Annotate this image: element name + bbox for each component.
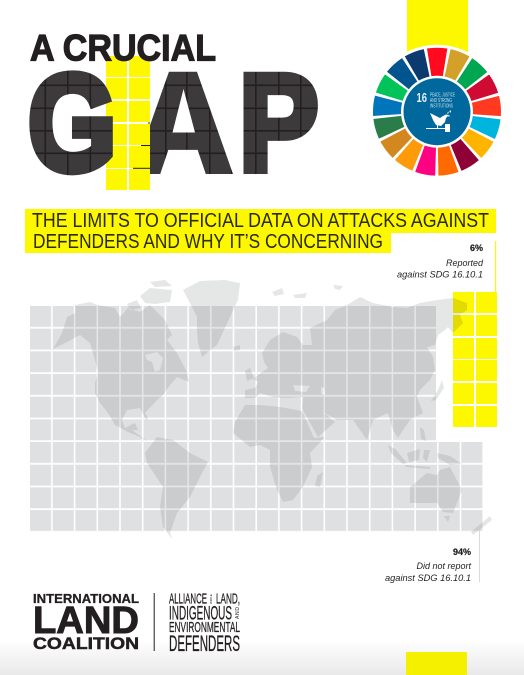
logo divider (154, 593, 155, 651)
map land outside grid (53, 280, 492, 540)
callout: 6% reported: against SDG 16.10.1 (397, 270, 483, 280)
callout: 94% did not report: 94% (453, 547, 471, 557)
callout: 6% reported: Reported (446, 258, 484, 268)
callout: 6% reported: 6% (470, 243, 483, 253)
title: A CRUCIAL: A CRUCIAL (30, 28, 216, 68)
callout: 94% did not report (385, 547, 471, 583)
subtitle (32, 210, 489, 253)
goal name (430, 93, 455, 110)
grid ticks in gaps (133, 122, 150, 169)
logo: Alliance for Land, Indigenous and Environmental Defenders: ENVIRONMENTAL (169, 620, 240, 636)
logo: Alliance for Land, Indigenous and Environmental Defenders: DEFENDERS (169, 631, 240, 656)
bottom shaded band (0, 640, 524, 675)
goal name: AND STRONG (430, 98, 452, 104)
bottom yellow tab (406, 652, 467, 675)
world map grid (30, 280, 492, 540)
yellow column cells (106, 56, 150, 190)
callout: 6% reported (397, 243, 484, 280)
subtitle highlight (25, 209, 496, 253)
goal name: PEACE, JUSTICE (430, 93, 455, 99)
logo: Alliance for Land, Indigenous and Environmental Defenders: LAND, (216, 592, 240, 608)
SDG 16 wheel (366, 41, 508, 182)
counter of letter A (172, 89, 195, 132)
logo: Alliance for Land, Indigenous and Environmental Defenders: INDIGENOUS (169, 603, 232, 624)
white backing behind yellow column (104, 52, 150, 192)
map land inside grid (53, 306, 482, 531)
logo: Alliance for Land, Indigenous and Environmental Defenders (169, 592, 241, 656)
central blue disc (404, 78, 470, 145)
logo: Alliance for Land, Indigenous and Environmental Defenders: AND (235, 607, 241, 619)
callout: 94% did not report: against SDG 16.10.1 (385, 573, 471, 583)
callout: 94% did not report: Did not report (416, 561, 471, 571)
logo: International Land Coalition: LAND (33, 600, 139, 642)
logo: Alliance for Land, Indigenous and Environmental Defenders: FOR THE (209, 594, 213, 604)
wheel segments (366, 41, 508, 182)
grid cells upper rows (30, 306, 436, 442)
goal name: INSTITUTIONS (430, 104, 453, 110)
logo: International Land Coalition: COALITION (33, 635, 139, 653)
letter G (29, 70, 113, 176)
subtitle: DEFENDERS AND WHY IT’S CONCERNING (33, 231, 383, 253)
top yellow tab (407, 0, 468, 52)
icon: dove and gavel (426, 110, 451, 132)
thin grey guide line (479, 530, 480, 582)
logo: International Land Coalition (33, 591, 139, 653)
white wheel backing (370, 45, 504, 179)
grid cells lower rows (30, 442, 483, 532)
big word GAP (29, 56, 318, 190)
goal number: 16 (416, 90, 427, 105)
logo: International Land Coalition: INTERNATIONAL (33, 591, 139, 606)
yellow reported cells (453, 241, 497, 427)
letters A and P (150, 72, 318, 174)
logo: Alliance for Land, Indigenous and Environmental Defenders: ALLIANCE (169, 592, 207, 608)
map land over yellow cells (453, 298, 467, 333)
